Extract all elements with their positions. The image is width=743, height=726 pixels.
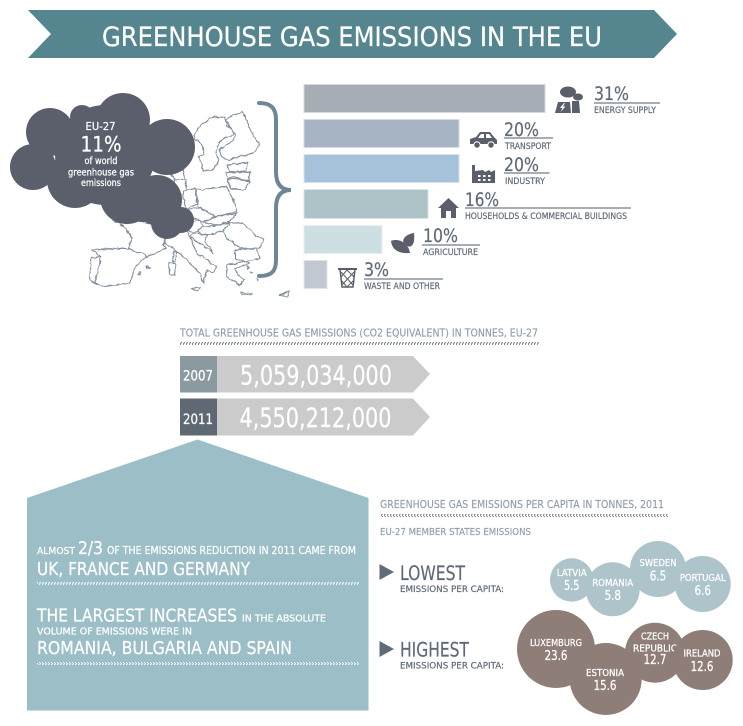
label: households: 16% <box>465 189 499 211</box>
bubble: Czech Republic: 12.7 <box>644 653 666 668</box>
title: GREENHOUSE GAS EMISSIONS IN THE EU <box>102 22 602 53</box>
icon: car <box>470 132 497 148</box>
cloud text: emissions <box>81 178 121 189</box>
bubbles: highest emitters: 23.6 <box>545 649 567 664</box>
bubbles: lowest emitters: 5.5 <box>564 579 579 594</box>
bubbles: highest emitters <box>517 610 733 715</box>
curly brace <box>259 103 291 276</box>
icon: waste bin <box>338 269 357 287</box>
arrow: 2007: 5,059,034,000 <box>240 360 392 392</box>
arrow: 2011: 4,550,212,000 <box>240 403 392 434</box>
cloud text: of world <box>84 156 118 167</box>
finding: increases: ROMANIA, BULGARIA AND SPAIN <box>37 638 292 659</box>
arrow: 2011: 2011 <box>183 412 213 428</box>
label: highest <box>380 638 504 672</box>
bubbles: lowest emitters: 5.8 <box>604 589 621 604</box>
label: lowest: EMISSIONS PER CAPITA: <box>400 584 504 595</box>
bar: transport <box>304 120 459 148</box>
label: industry <box>504 154 550 187</box>
subheading: member states: EU-27 MEMBER STATES EMISSIONS <box>380 527 531 538</box>
bubble: Ireland: IRELAND <box>684 648 720 660</box>
label: industry: 20% <box>504 154 539 176</box>
label: waste: WASTE AND OTHER <box>364 281 441 292</box>
finding: increases: VOLUME OF EMISSIONS WERE IN <box>37 626 192 638</box>
title banner <box>28 10 677 58</box>
cloud text <box>68 120 134 189</box>
label: transport: 20% <box>504 119 539 141</box>
cloud text: 11% <box>80 132 122 156</box>
label: highest: EMISSIONS PER CAPITA: <box>400 660 504 672</box>
icon: leaves <box>391 233 414 253</box>
finding: increases <box>36 606 359 665</box>
label: energy supply <box>594 83 660 116</box>
bar: waste <box>304 260 327 288</box>
finding: increases: IN THE ABSOLUTE <box>242 614 326 624</box>
bubble: Latvia: LATVIA <box>557 568 587 579</box>
label: energy supply: ENERGY SUPPLY <box>594 105 656 116</box>
bubble: Ireland: 12.6 <box>691 660 713 675</box>
bubble: Czech Republic <box>633 632 677 668</box>
icon: house <box>438 198 459 218</box>
label: industry: INDUSTRY <box>505 176 545 187</box>
bubble: Estonia: ESTONIA <box>586 668 624 679</box>
bubbles: lowest emitters <box>550 541 731 616</box>
label: transport <box>504 119 553 152</box>
bubble: Czech Republic: CZECH <box>641 632 669 642</box>
label: agriculture: 10% <box>423 225 458 247</box>
bubble: Czech Republic: REPUBLIC <box>633 644 677 654</box>
label: highest: HIGHEST <box>400 638 469 662</box>
label: lowest <box>380 562 504 595</box>
bar: industry <box>304 154 459 182</box>
label: households: HOUSEHOLDS & COMMERCIAL BUILDINGS <box>465 211 627 222</box>
heading: total emissions: TOTAL GREENHOUSE GAS EMISSIONS (CO2 EQUIVALENT) IN TONNES, EU-27 <box>179 326 538 340</box>
finding: reduction <box>37 538 359 585</box>
finding: increases: THE LARGEST INCREASES <box>36 606 237 626</box>
bar: agriculture <box>304 226 382 254</box>
bubble: Portugal: PORTUGAL <box>680 573 726 584</box>
label: transport: TRANSPORT <box>504 141 551 152</box>
icon: power plant <box>555 86 583 113</box>
label: agriculture: AGRICULTURE <box>423 247 478 258</box>
icon: factory <box>472 165 495 183</box>
finding: reduction: OF THE EMISSIONS REDUCTION IN 2011 CAME FROM <box>107 545 356 557</box>
label: households <box>465 189 631 222</box>
label: waste <box>364 259 443 292</box>
bubble: Ireland <box>673 630 733 690</box>
cloud text: greenhouse gas <box>68 168 134 178</box>
arrow: 2007 <box>180 356 430 392</box>
bar chart <box>304 84 545 288</box>
finding: reduction: UK, FRANCE AND GERMANY <box>37 559 251 580</box>
cloud text: EU-27 <box>86 120 116 133</box>
arrow: 2011 <box>180 398 430 436</box>
bubbles: lowest emitters: 6.5 <box>650 570 666 584</box>
label: lowest: LOWEST <box>400 562 465 585</box>
heading: per capita: GREENHOUSE GAS EMISSIONS PER CAPITA IN TONNES, 2011 <box>380 498 664 511</box>
arrow: 2007: 2007 <box>183 368 213 384</box>
finding: reduction: 2/3 <box>78 538 103 559</box>
bar: energy supply <box>304 84 545 112</box>
bubbles: highest emitters: 15.6 <box>594 679 616 694</box>
bubble: Romania: ROMANIA <box>592 578 634 589</box>
finding: reduction: ALMOST <box>37 546 75 557</box>
bar: households <box>304 190 428 218</box>
label: agriculture <box>422 225 480 258</box>
bubble: Luxemburg: LUXEMBURG <box>530 638 582 649</box>
map of Europe <box>89 112 290 297</box>
bubble: Sweden: SWEDEN <box>640 558 676 569</box>
emissions cloud <box>10 93 195 239</box>
label: energy supply: 31% <box>594 83 629 105</box>
panel: house-shaped findings <box>27 440 368 710</box>
label: waste: 3% <box>364 259 389 281</box>
bubbles: lowest emitters: 6.6 <box>694 584 711 599</box>
